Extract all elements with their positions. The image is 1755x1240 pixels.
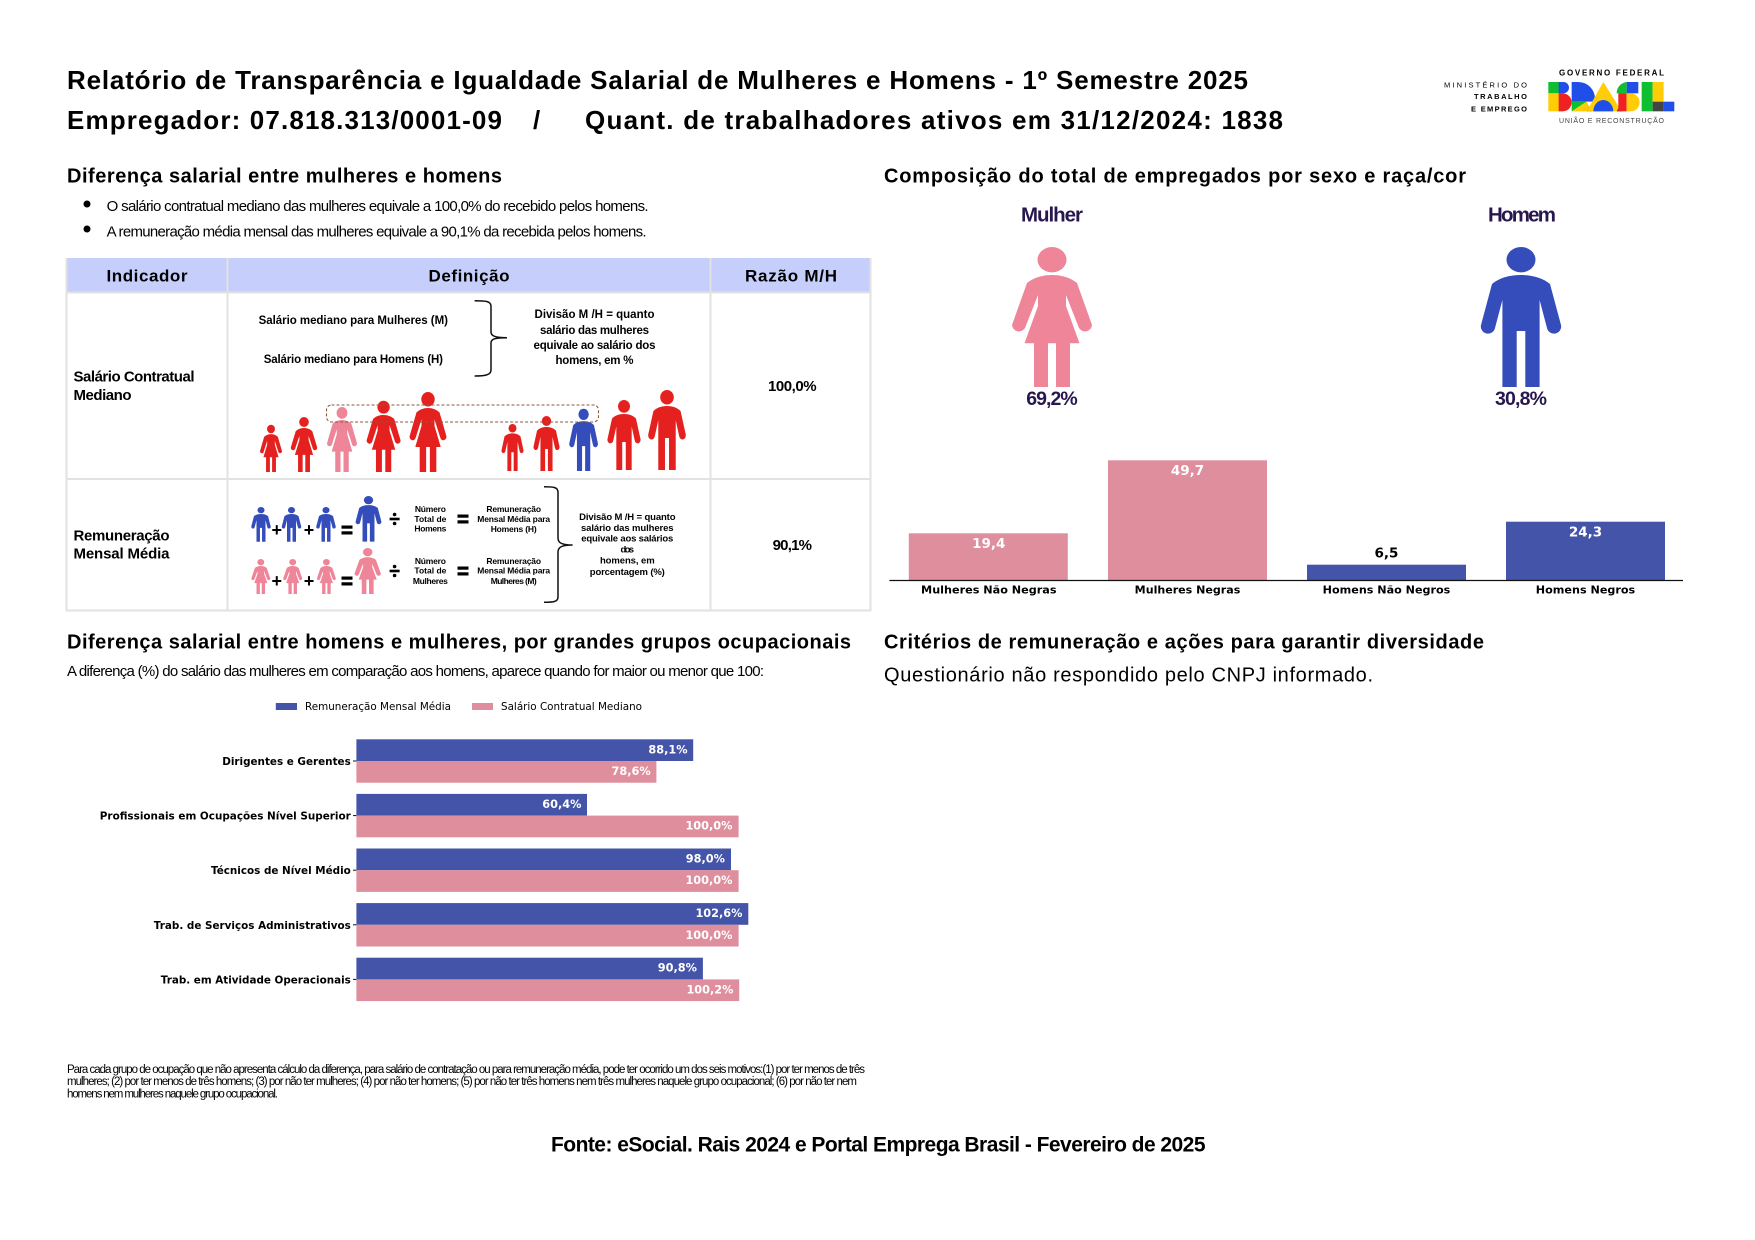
women equation text: Remuneração — [486, 556, 541, 566]
women equation text: Mensal Média para — [477, 566, 550, 576]
title: Relatório de Transparência e Igualdade Salarial de Mulheres e Homens - 1º Semestre 2025 — [67, 65, 1248, 95]
title: / — [533, 105, 540, 135]
bullet list: A remuneração média mensal das mulheres equivale a 90,1% da recebida pelos homens. — [107, 224, 647, 241]
row: técnicos: 100,0% — [685, 874, 732, 887]
row: salário contratual mediano: 100,0% — [768, 378, 817, 395]
row: técnicos: 98,0% — [686, 852, 725, 866]
row: serviços administrativos — [154, 903, 748, 946]
operators: + — [271, 571, 282, 591]
panel: man share: 30,8% — [1495, 388, 1547, 410]
panel: woman share: 69,2% — [1026, 388, 1078, 410]
men equation text — [414, 504, 550, 534]
bar chart: sexo e raça/cor: 6,5 — [1375, 545, 1398, 561]
women equation text: Total de — [414, 566, 447, 576]
division explanation — [579, 512, 676, 578]
panel: man share — [1481, 204, 1561, 410]
footnote: Para cada grupo de ocupação que não apresenta cálculo da diferença, para salário de contratação ou para remuneração média, pode ter ocorrido um dos seis motivos:(1) por ter menos de três — [67, 1064, 865, 1076]
row: remuneração mensal média — [74, 487, 812, 602]
icon: median men — [501, 390, 686, 471]
division explanation: porcentagem (%) — [590, 567, 665, 578]
logo: ministério: TRABALHO — [1474, 92, 1527, 101]
footnote: homens nem mulheres naquele grupo ocupacional. — [67, 1088, 278, 1100]
division explanation: dos — [621, 545, 634, 556]
brace — [475, 301, 507, 376]
division explanation — [534, 309, 656, 367]
operators: + — [304, 571, 314, 591]
table header: Indicador — [106, 267, 188, 286]
bar chart: sexo e raça/cor: Homens Negros — [1536, 584, 1635, 596]
table header: Razão M/H — [745, 267, 837, 286]
row: profissionais: 100,0% — [685, 820, 732, 833]
table header: Definição — [428, 267, 510, 286]
row: serviços administrativos: 100,0% — [685, 929, 732, 942]
division explanation: homens, em — [600, 556, 655, 567]
row: salário contratual mediano: Salário mediano para Mulheres (M) — [259, 315, 448, 327]
panel: woman share — [1012, 204, 1092, 410]
text: questionário: Questionário não respondido pelo CNPJ informado. — [884, 665, 1373, 687]
division explanation: equivale aos salários — [581, 534, 673, 545]
row: dirigentes e gerentes: Dirigentes e Gerentes — [222, 756, 351, 768]
women equation text: Mulheres (M) — [491, 576, 537, 586]
row: salário contratual mediano: Mediano — [74, 387, 132, 404]
row: profissionais: Profissionais em Ocupações Nível Superior — [100, 811, 352, 823]
bar chart: sexo e raça/cor: Mulheres Negras — [1135, 584, 1240, 596]
row: dirigentes e gerentes — [222, 739, 693, 783]
bar chart: grupos ocupacionais — [100, 739, 748, 1001]
row: salário contratual mediano: Salário mediano para Homens (H) — [264, 354, 443, 366]
men equation text: Homens (H) — [491, 524, 537, 534]
division explanation: salário das mulheres — [581, 523, 674, 534]
heading: grupos ocupacionais: Diferença salarial entre homens e mulheres, por grandes grupos ocupacionais — [67, 632, 851, 654]
division explanation: homens, em % — [556, 355, 634, 367]
title: Quant. de trabalhadores ativos em 31/12/2024: 1838 — [585, 105, 1283, 135]
women equation text — [413, 556, 550, 586]
row: profissionais: 60,4% — [542, 798, 582, 811]
subheading: diferença explanation: A diferença (%) do salário das mulheres em comparação aos homens, aparece quando for maior ou menor que 100: — [67, 663, 764, 680]
row: salário contratual mediano: Salário Contratual — [74, 369, 194, 386]
men equation text: Remuneração — [486, 504, 541, 514]
legend: Remuneração Mensal Média — [305, 701, 451, 713]
bullet list — [84, 198, 649, 241]
operators: + — [304, 520, 314, 540]
legend: Salário Contratual Mediano — [501, 701, 642, 713]
source: Fonte: eSocial. Rais 2024 e Portal Emprega Brasil - Fevereiro de 2025 — [551, 1134, 1206, 1157]
row: serviços administrativos: Trab. de Serviços Administrativos — [154, 920, 351, 932]
footnote: mulheres; (2) por ter menos de três homens; (3) por não ter mulheres; (4) por não ter homens; (5) por não ter três homens nem três mulheres naquele grupo ocupacional; (6) por não ter nem — [67, 1076, 857, 1088]
logo: governo federal brasil — [1548, 68, 1674, 125]
legend — [276, 701, 642, 713]
men equation text: Total de — [414, 514, 447, 524]
panel: indicator table — [66, 258, 871, 610]
table header — [66, 258, 871, 292]
bar chart: sexo e raça/cor: 19,4 — [972, 536, 1005, 552]
women equation text: Mulheres — [413, 576, 448, 586]
bar chart: sexo e raça/cor: 24,3 — [1569, 525, 1602, 541]
row: atividade operacionais — [161, 958, 739, 1001]
row: dirigentes e gerentes: 78,6% — [611, 765, 651, 778]
row: atividade operacionais: Trab. em Atividade Operacionais — [161, 974, 351, 986]
heading: critérios: Critérios de remuneração e ações para garantir diversidade — [884, 631, 1484, 653]
bullet list: O salário contratual mediano das mulheres equivale a 100,0% do recebido pelos homens. — [107, 198, 649, 215]
bar chart: sexo e raça/cor — [889, 460, 1683, 596]
icon: men average equation — [251, 496, 381, 542]
icon: median women — [260, 392, 446, 472]
division explanation: Divisão M /H = quanto — [579, 512, 676, 523]
bar chart: sexo e raça/cor: Mulheres Não Negras — [921, 584, 1057, 596]
heading: composição: Composição do total de empregados por sexo e raça/cor — [884, 166, 1466, 188]
row: remuneração mensal média: Remuneração — [74, 528, 170, 545]
footnote — [67, 1064, 865, 1100]
logo: governo federal brasil: UNIÃO E RECONSTRUÇÃO — [1559, 116, 1665, 125]
row: atividade operacionais: 100,2% — [686, 983, 734, 996]
row: profissionais — [100, 794, 739, 837]
row: remuneração mensal média: 90,1% — [773, 537, 812, 554]
women equation text: Número — [415, 556, 446, 566]
row: dirigentes e gerentes: 88,1% — [648, 743, 688, 756]
men equation text: Homens — [414, 524, 447, 534]
row: serviços administrativos: 102,6% — [695, 907, 742, 920]
operators: + — [271, 520, 282, 540]
division explanation: equivale ao salário dos — [534, 340, 656, 352]
heading: diferença salarial: Diferença salarial entre mulheres e homens — [67, 166, 502, 188]
title: Empregador: 07.818.313/0001-09 — [67, 105, 502, 135]
logo: ministério — [1444, 81, 1527, 113]
title — [67, 65, 1283, 135]
brace — [544, 487, 573, 602]
row: remuneração mensal média: Mensal Média — [74, 545, 170, 562]
men equation text: Mensal Média para — [477, 514, 550, 524]
operators — [271, 513, 468, 591]
logo: ministério: E EMPREGO — [1471, 104, 1527, 113]
bar chart: sexo e raça/cor: Homens Não Negros — [1323, 584, 1450, 596]
row: técnicos: Técnicos de Nível Médio — [211, 865, 351, 877]
bar chart: sexo e raça/cor: 49,7 — [1171, 463, 1204, 479]
row: técnicos — [211, 848, 739, 892]
division explanation: Divisão M /H = quanto — [534, 309, 654, 321]
panel: man share: Homem — [1488, 204, 1556, 227]
division explanation: salário das mulheres — [540, 325, 649, 337]
row: atividade operacionais: 90,8% — [658, 962, 697, 975]
men equation text: Número — [415, 504, 446, 514]
logo: ministério: MINISTÉRIO DO — [1444, 81, 1527, 90]
row: salário contratual mediano — [74, 301, 817, 472]
icon: women average equation — [251, 548, 381, 594]
logo: governo federal brasil: GOVERNO FEDERAL — [1559, 68, 1664, 77]
panel: woman share: Mulher — [1021, 204, 1083, 227]
